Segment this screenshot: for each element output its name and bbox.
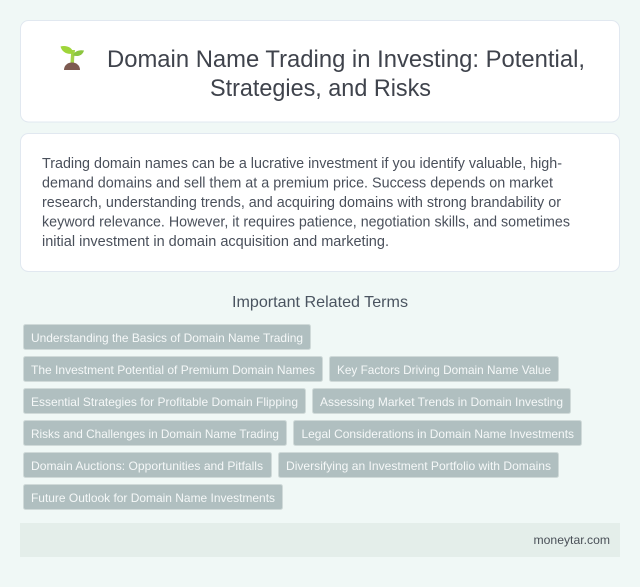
text block: introduction: initial investment in domain acquisition and marketing. bbox=[42, 233, 389, 250]
panel: introduction text bbox=[20, 134, 620, 272]
tag: The Investment Potential of Premium Domain Names bbox=[31, 363, 315, 377]
text block: introduction: research, understanding trends, and acquiring domains with strong brandability or bbox=[42, 194, 561, 211]
text block: introduction: keyword relevance. However, it requires patience, negotiation skills, and sometimes bbox=[42, 214, 570, 230]
title: Domain Name Trading in Investing: Potential, bbox=[107, 46, 585, 73]
tag: Diversifying an Investment Portfolio with Domains bbox=[286, 459, 551, 473]
panel: related term tags bbox=[24, 324, 582, 510]
tag bbox=[24, 356, 322, 382]
tag: Key Factors Driving Domain Name Value bbox=[337, 363, 551, 377]
tag: Future Outlook for Domain Name Investments bbox=[31, 491, 275, 505]
heading: related terms: Important Related Terms bbox=[232, 294, 408, 311]
tag: Essential Strategies for Profitable Domain Flipping bbox=[31, 395, 298, 409]
tag: Understanding the Basics of Domain Name Trading bbox=[31, 331, 303, 345]
icon: seedling bbox=[60, 46, 84, 70]
tag bbox=[24, 388, 306, 414]
tag bbox=[294, 420, 582, 446]
tag bbox=[24, 420, 286, 446]
title bbox=[107, 46, 585, 102]
title: Strategies, and Risks bbox=[210, 75, 431, 102]
tag bbox=[24, 324, 310, 350]
tag bbox=[330, 356, 558, 382]
text block: introduction bbox=[42, 155, 570, 250]
panel: title header bbox=[20, 20, 620, 122]
tag bbox=[312, 388, 570, 414]
tag: Legal Considerations in Domain Name Investments bbox=[302, 427, 574, 441]
tag bbox=[24, 484, 282, 510]
footer source text: moneytar.com bbox=[534, 533, 610, 547]
tag: Risks and Challenges in Domain Name Trading bbox=[31, 427, 279, 441]
text block: introduction: Trading domain names can be a lucrative investment if you identify valuable, high- bbox=[42, 155, 562, 172]
tag bbox=[24, 452, 272, 478]
text block: introduction: demand domains and sell them at a premium price. Success depends on market bbox=[42, 174, 554, 192]
tag: Domain Auctions: Opportunities and Pitfalls bbox=[31, 459, 263, 473]
tag bbox=[278, 452, 558, 478]
footer bbox=[20, 523, 620, 557]
tag: Assessing Market Trends in Domain Investing bbox=[320, 395, 563, 409]
